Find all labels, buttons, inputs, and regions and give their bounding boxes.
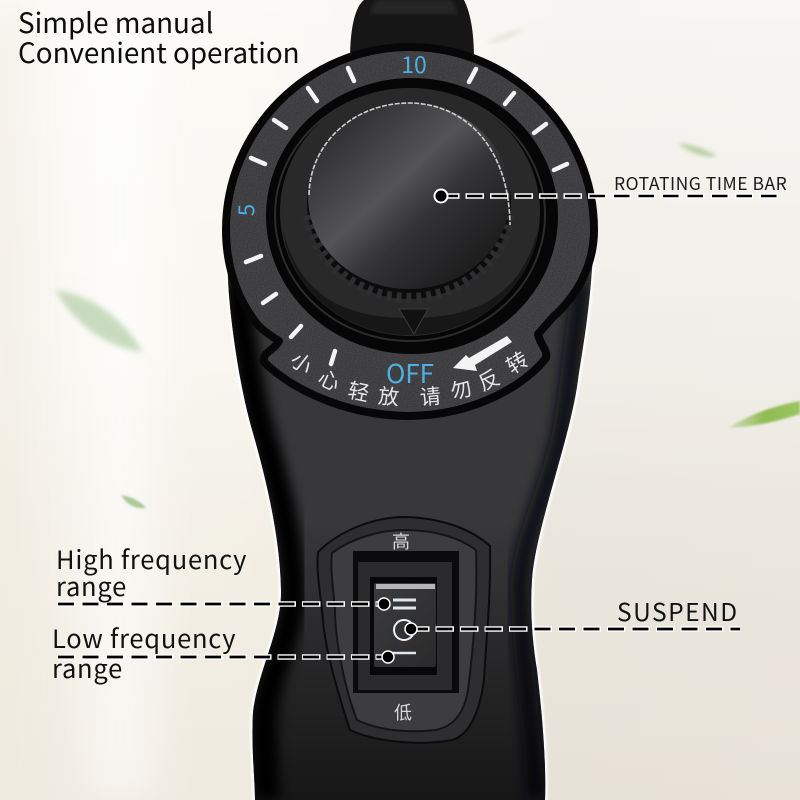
callout: high frequency range: range — [56, 567, 127, 604]
callout: low frequency range: Low frequency — [52, 619, 236, 656]
warning text on badge: 转 — [500, 344, 534, 381]
OFF label: OFF — [386, 354, 434, 391]
switch bezel — [317, 517, 490, 743]
callout: high frequency range: High frequency — [56, 540, 247, 577]
symbol low — [390, 652, 416, 654]
rocker top highlight — [376, 584, 435, 589]
knob top — [308, 103, 510, 289]
callout: low frequency range — [52, 619, 394, 686]
white edge halo — [226, 240, 594, 800]
ring grain — [230, 51, 590, 412]
low mark: 低 — [394, 699, 412, 725]
callout: rotating time bar: ROTATING TIME BAR — [614, 171, 787, 196]
neck highlight — [370, 0, 458, 14]
rocker switch — [317, 517, 490, 743]
opening inner rim — [275, 89, 545, 341]
title: Convenient operation — [18, 32, 300, 72]
warning text on badge: 放 — [377, 380, 400, 412]
title — [18, 2, 300, 72]
dial housing — [226, 47, 594, 416]
warning text on badge — [284, 344, 534, 412]
dial well — [280, 88, 540, 336]
knob top serrated highlight — [309, 103, 510, 225]
rocker well — [370, 577, 437, 675]
symbol suspend — [394, 620, 414, 640]
warning text on badge: 轻 — [345, 374, 372, 408]
rocker surround — [358, 562, 452, 690]
callout: suspend: SUSPEND — [617, 594, 739, 629]
pointer triangle — [399, 309, 428, 334]
callout: high frequency range — [56, 540, 390, 610]
warning text on badge: 反 — [473, 362, 504, 398]
leaf: right green — [728, 401, 800, 428]
bezel inner panel — [331, 530, 476, 731]
title: Simple manual — [18, 2, 213, 42]
knob skirt — [307, 105, 511, 299]
warning text on badge: 请 — [419, 380, 442, 412]
callout: low frequency range: range — [52, 649, 123, 686]
device silhouette — [220, 0, 600, 800]
scale ticks — [246, 68, 567, 364]
direction arrow — [453, 336, 512, 371]
warning text on badge: 心 — [314, 362, 345, 398]
warning text on badge: 勿 — [447, 372, 475, 406]
leaf: blurred left — [55, 290, 143, 352]
leaf: upper right — [678, 143, 718, 157]
knob teeth — [308, 215, 510, 298]
scale number 10: 10 — [401, 46, 427, 80]
high mark: 高 — [392, 528, 410, 554]
handle shading — [220, 280, 600, 800]
warning text on badge: 小 — [284, 344, 319, 381]
scale number 5: 5 — [229, 204, 261, 216]
opening black rim — [266, 78, 558, 354]
callout: rotating time bar — [434, 171, 787, 202]
neck — [350, 0, 474, 60]
handle body — [226, 240, 594, 800]
symbol high — [393, 600, 416, 608]
rocker — [374, 583, 436, 667]
well lower shading — [283, 230, 538, 335]
socket — [353, 551, 459, 693]
scale ring with lower badge — [226, 47, 594, 416]
callout: suspend — [405, 594, 740, 635]
leaf: top centre — [487, 28, 525, 43]
leaf: lower left — [121, 495, 146, 508]
